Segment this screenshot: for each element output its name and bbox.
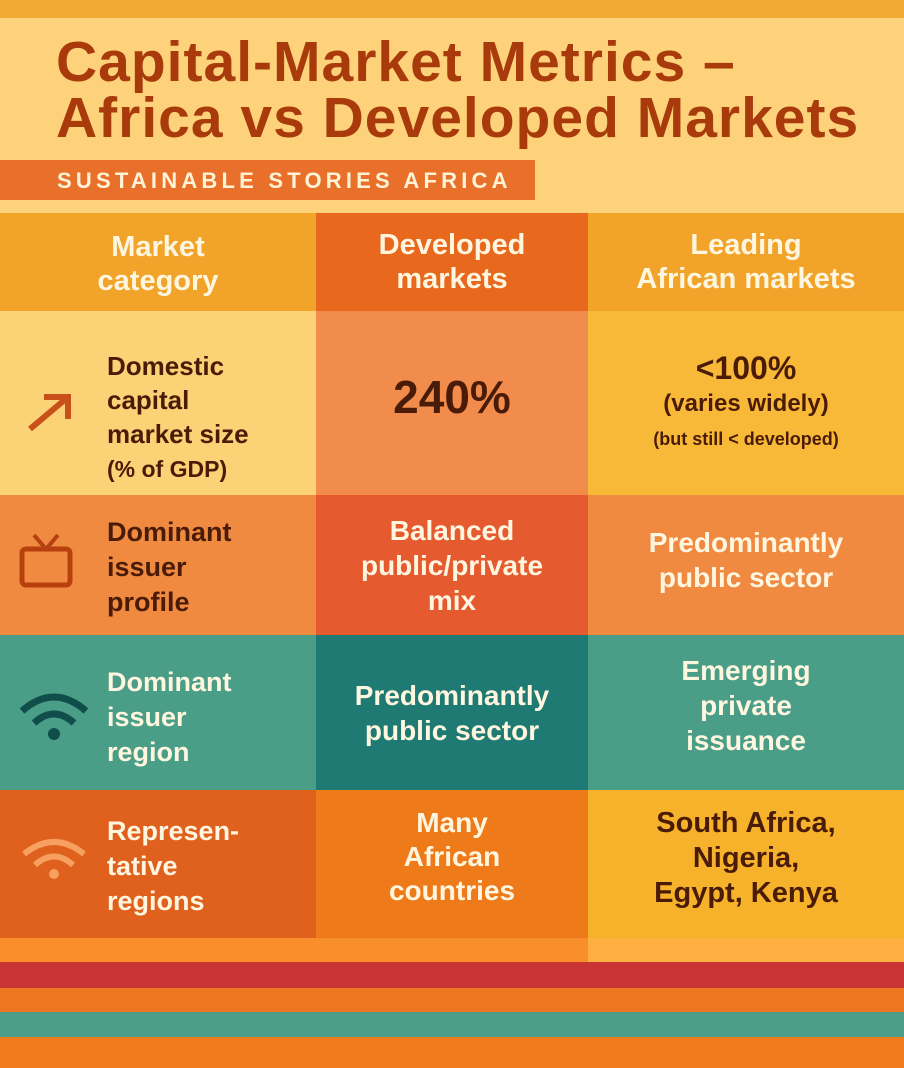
row 1 label: market size bbox=[107, 419, 249, 449]
row 1 developed: 240% bbox=[393, 371, 511, 423]
row 2 developed: Balanced bbox=[390, 514, 514, 546]
row 4 label bbox=[0, 790, 316, 938]
row 2 africa bbox=[588, 495, 904, 635]
row 2 africa: public sector bbox=[659, 562, 833, 593]
row 1 label bbox=[0, 311, 316, 495]
icon: wifi light bbox=[22, 838, 86, 879]
header: market category: category bbox=[98, 265, 218, 297]
subtitle banner: SUSTAINABLE STORIES AFRICA bbox=[57, 168, 512, 193]
row 1 developed bbox=[316, 311, 588, 495]
row 4 africa: South Africa, bbox=[656, 806, 836, 838]
row 2 africa: Predominantly bbox=[649, 527, 843, 558]
row 3 developed: Predominantly bbox=[355, 680, 549, 710]
header: developed markets bbox=[316, 213, 588, 311]
row 2 label: issuer bbox=[107, 552, 187, 582]
row 2 label: Dominant bbox=[107, 517, 232, 547]
row 4 africa bbox=[588, 790, 904, 938]
row 1 africa: (varies widely) bbox=[663, 390, 829, 417]
header: developed markets: Developed bbox=[379, 229, 525, 261]
row 1 label: capital bbox=[107, 385, 189, 415]
row 3 africa: issuance bbox=[686, 725, 806, 756]
icon: wifi dark bbox=[20, 694, 88, 740]
icon: tv bbox=[20, 534, 72, 588]
row 3 africa: private bbox=[700, 690, 792, 721]
row 2 developed: mix bbox=[428, 584, 476, 616]
row 3 developed bbox=[316, 635, 588, 790]
row 3 africa: Emerging bbox=[681, 655, 811, 686]
header: developed markets: markets bbox=[396, 263, 508, 295]
row 4 africa: Egypt, Kenya bbox=[654, 876, 838, 908]
icon: arrow bbox=[28, 394, 71, 432]
row 2 developed: public/private bbox=[361, 550, 543, 580]
header: market category: Market bbox=[111, 231, 205, 263]
subtitle banner bbox=[0, 160, 535, 200]
row 1 africa: (but still < developed) bbox=[653, 429, 839, 449]
row 4 developed: African bbox=[404, 841, 500, 872]
row 2 developed bbox=[316, 495, 588, 635]
row 1 label: (% of GDP) bbox=[107, 456, 227, 482]
row 1 africa: <100% bbox=[696, 350, 796, 386]
header: leading african markets: Leading bbox=[690, 229, 802, 261]
title: Africa vs Developed Markets bbox=[56, 86, 859, 150]
row 2 label bbox=[0, 495, 316, 635]
row 1 africa bbox=[588, 311, 904, 495]
row 1 label: Domestic bbox=[107, 351, 224, 381]
row 2 label: profile bbox=[107, 587, 190, 617]
header: leading african markets bbox=[588, 213, 904, 311]
row 3 africa bbox=[588, 635, 904, 790]
row 3 label: region bbox=[107, 737, 190, 767]
row 3 developed: public sector bbox=[365, 714, 539, 746]
row 4 developed bbox=[316, 790, 588, 938]
row 3 label bbox=[0, 635, 316, 790]
row 3 label: issuer bbox=[107, 702, 187, 732]
row 4 africa: Nigeria, bbox=[693, 842, 799, 874]
title: Capital-Market Metrics – bbox=[56, 30, 736, 94]
header: market category bbox=[0, 213, 316, 311]
row 4 developed: Many bbox=[416, 807, 488, 838]
row 4 label: regions bbox=[107, 886, 205, 916]
row 3 label: Dominant bbox=[107, 667, 232, 697]
row 4 label: tative bbox=[107, 851, 178, 881]
header: leading african markets: African markets bbox=[636, 263, 856, 295]
row 4 developed: countries bbox=[389, 875, 515, 906]
title bbox=[56, 30, 859, 150]
table bbox=[0, 213, 904, 938]
row 4 label: Represen- bbox=[107, 816, 239, 846]
